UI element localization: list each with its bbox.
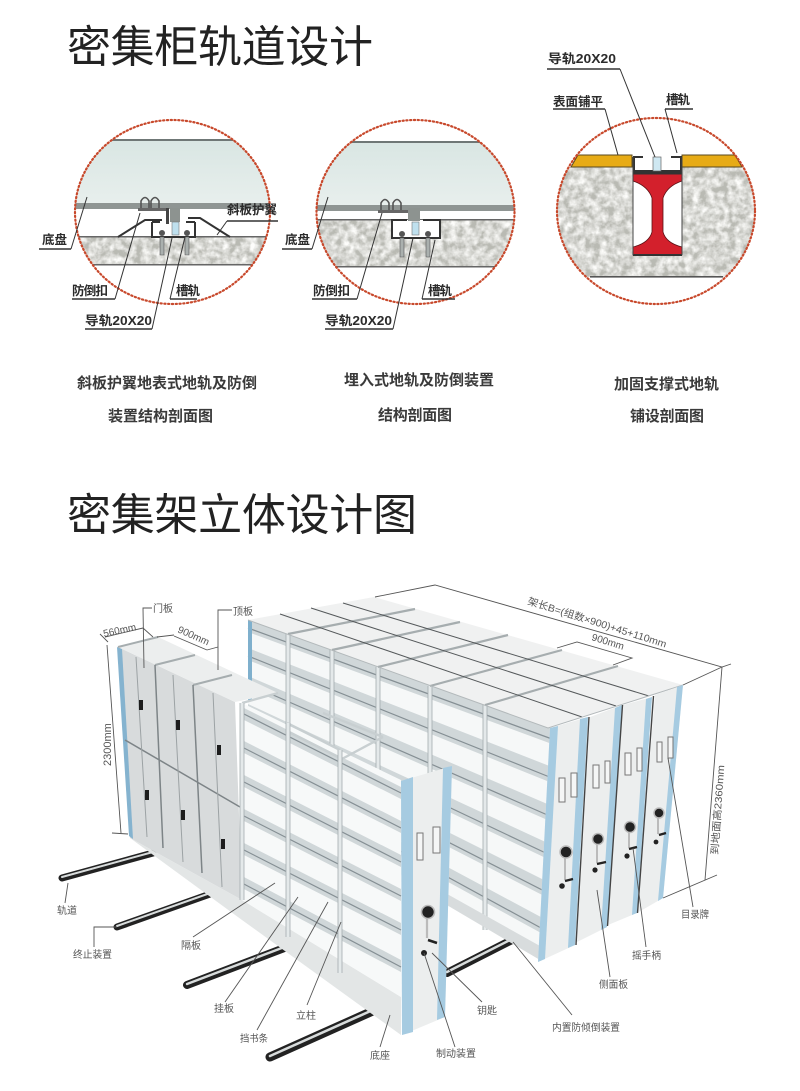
- cross-section circle 1: [70, 139, 275, 266]
- label: 挂板: [214, 897, 298, 1015]
- caption: sloped-guard rail: 斜板护翼地表式地轨及防倒: [77, 374, 257, 392]
- caption: embedded rail: 结构剖面图: [378, 406, 452, 424]
- label: 表面铺平: 表面铺平: [553, 94, 603, 109]
- label: 目录牌: 目录牌: [681, 908, 709, 921]
- label: 轨道: 轨道: [57, 904, 77, 917]
- label: 钥匙: 钥匙: [477, 1004, 497, 1017]
- title: 3D design: 密集架立体设计图: [67, 491, 417, 540]
- label: 立柱: 立柱: [296, 1009, 316, 1022]
- label: 终止装置: [73, 927, 117, 961]
- title: rail design: 密集柜轨道设计: [67, 23, 373, 72]
- handles and cranks: [559, 737, 673, 802]
- panel: embedded rail section: [282, 120, 520, 329]
- dimension: floor height 2360mm: 到地面高2360mm: [708, 765, 727, 855]
- label: 槽轨: 槽轨: [176, 283, 200, 298]
- label: 底盘: [39, 197, 87, 249]
- dimension: 2300mm: [102, 645, 128, 834]
- label: 挂板: 挂板: [214, 1002, 234, 1015]
- front block: end panel: [401, 766, 452, 1035]
- label: 立柱: [296, 922, 341, 1022]
- label: 制动装置: [424, 953, 476, 1060]
- label: 顶板: 顶板: [233, 605, 253, 618]
- label: 防倒扣: 防倒扣: [72, 283, 108, 298]
- label: 导轨20X20: 导轨20X20: [548, 51, 616, 66]
- label: 隔板: 隔板: [181, 939, 201, 952]
- label: 侧面板: 侧面板: [599, 978, 628, 991]
- label: 底盘: 底盘: [42, 232, 67, 247]
- label: 底盘: [282, 197, 328, 249]
- label: 目录牌: [668, 758, 709, 921]
- label: 表面铺平: [553, 94, 618, 155]
- label: 防倒扣: [72, 213, 140, 299]
- label: 导轨20X20: [325, 238, 413, 329]
- label: 侧面板: [597, 890, 628, 991]
- label: 内置防倾倒装置: [513, 942, 620, 1034]
- dotted circle outline 2: [316, 120, 514, 304]
- dimension: overall length: 架长B=(组数×900)+45+110mm: [526, 594, 668, 650]
- dimension: bay 900mm: 900mm: [590, 632, 625, 653]
- dimension: 900mm: 900mm: [176, 625, 211, 648]
- label: 槽轨: [665, 92, 693, 153]
- label: 导轨20X20: [85, 238, 172, 329]
- label: 斜板护翼: 斜板护翼: [227, 202, 277, 217]
- label: 底座: 底座: [370, 1049, 390, 1062]
- label: 槽轨: 槽轨: [428, 283, 452, 298]
- caption: embedded rail: 埋入式地轨及防倒装置: [344, 371, 494, 389]
- panel: sloped-guard surface rail section: [39, 120, 278, 329]
- label: 轨道: [57, 883, 77, 917]
- label: 槽轨: [422, 240, 455, 299]
- floor rails: [62, 852, 512, 1057]
- cross-section circle 3: [555, 155, 759, 278]
- front block: open shelves: [240, 693, 401, 997]
- label: 制动装置: 制动装置: [436, 1047, 476, 1060]
- dimension: 560mm: 560mm: [102, 622, 137, 640]
- label: 导轨20X20: 导轨20X20: [85, 313, 152, 328]
- dimension: floor height 2360mm: [663, 667, 727, 898]
- dotted circle outline 1: [75, 120, 270, 304]
- label: 终止装置: 终止装置: [73, 948, 112, 961]
- label: 导轨20X20: 导轨20X20: [325, 313, 392, 328]
- dimension: bay 900mm: [557, 632, 632, 665]
- caption: sloped-guard rail: [77, 374, 257, 425]
- label: 挡书条: 挡书条: [240, 1032, 268, 1045]
- dotted circle outline 3: [557, 118, 755, 304]
- label: 防倒扣: [312, 213, 382, 299]
- dimension: overall length: [375, 585, 731, 685]
- label: 钥匙: [432, 953, 497, 1017]
- caption: reinforced rail: [614, 375, 719, 425]
- back shelving block: shelves: [248, 620, 552, 960]
- label: 槽轨: 槽轨: [666, 92, 690, 107]
- caption: sloped-guard rail: 装置结构剖面图: [108, 407, 213, 425]
- label: 摇手柄: [632, 848, 661, 962]
- dimension: 2300mm: 2300mm: [102, 723, 114, 766]
- back shelving block: top plates: [248, 597, 683, 728]
- label: 内置防倾倒装置: 内置防倾倒装置: [552, 1021, 620, 1034]
- label: 隔板: [181, 883, 275, 952]
- caption: reinforced rail: 铺设剖面图: [630, 407, 704, 425]
- dimension: 560mm: [100, 622, 153, 642]
- back shelving block: end panels: [538, 685, 683, 962]
- panel: reinforced support rail section: [547, 51, 759, 304]
- panel: mobile shelving 3D diagram: [57, 585, 731, 1062]
- label: 底座: [370, 1015, 390, 1062]
- label: 槽轨: [170, 237, 200, 299]
- label: 防倒扣: 防倒扣: [313, 283, 350, 298]
- label: 摇手柄: 摇手柄: [632, 949, 661, 962]
- label: 门板: 门板: [153, 602, 173, 615]
- cross-section circle 2: [312, 141, 520, 268]
- label: 顶板: [218, 605, 253, 670]
- front block: door panels: [117, 637, 401, 1035]
- dimension: 900mm: [157, 625, 218, 650]
- label: 门板: [143, 602, 173, 668]
- label: 斜板护翼: [217, 202, 278, 235]
- caption: embedded rail: [344, 371, 494, 424]
- label: 底盘: 底盘: [285, 232, 310, 247]
- label: 导轨20X20: [547, 51, 655, 157]
- label: 挡书条: [240, 902, 328, 1045]
- caption: reinforced rail: 加固支撑式地轨: [614, 375, 719, 393]
